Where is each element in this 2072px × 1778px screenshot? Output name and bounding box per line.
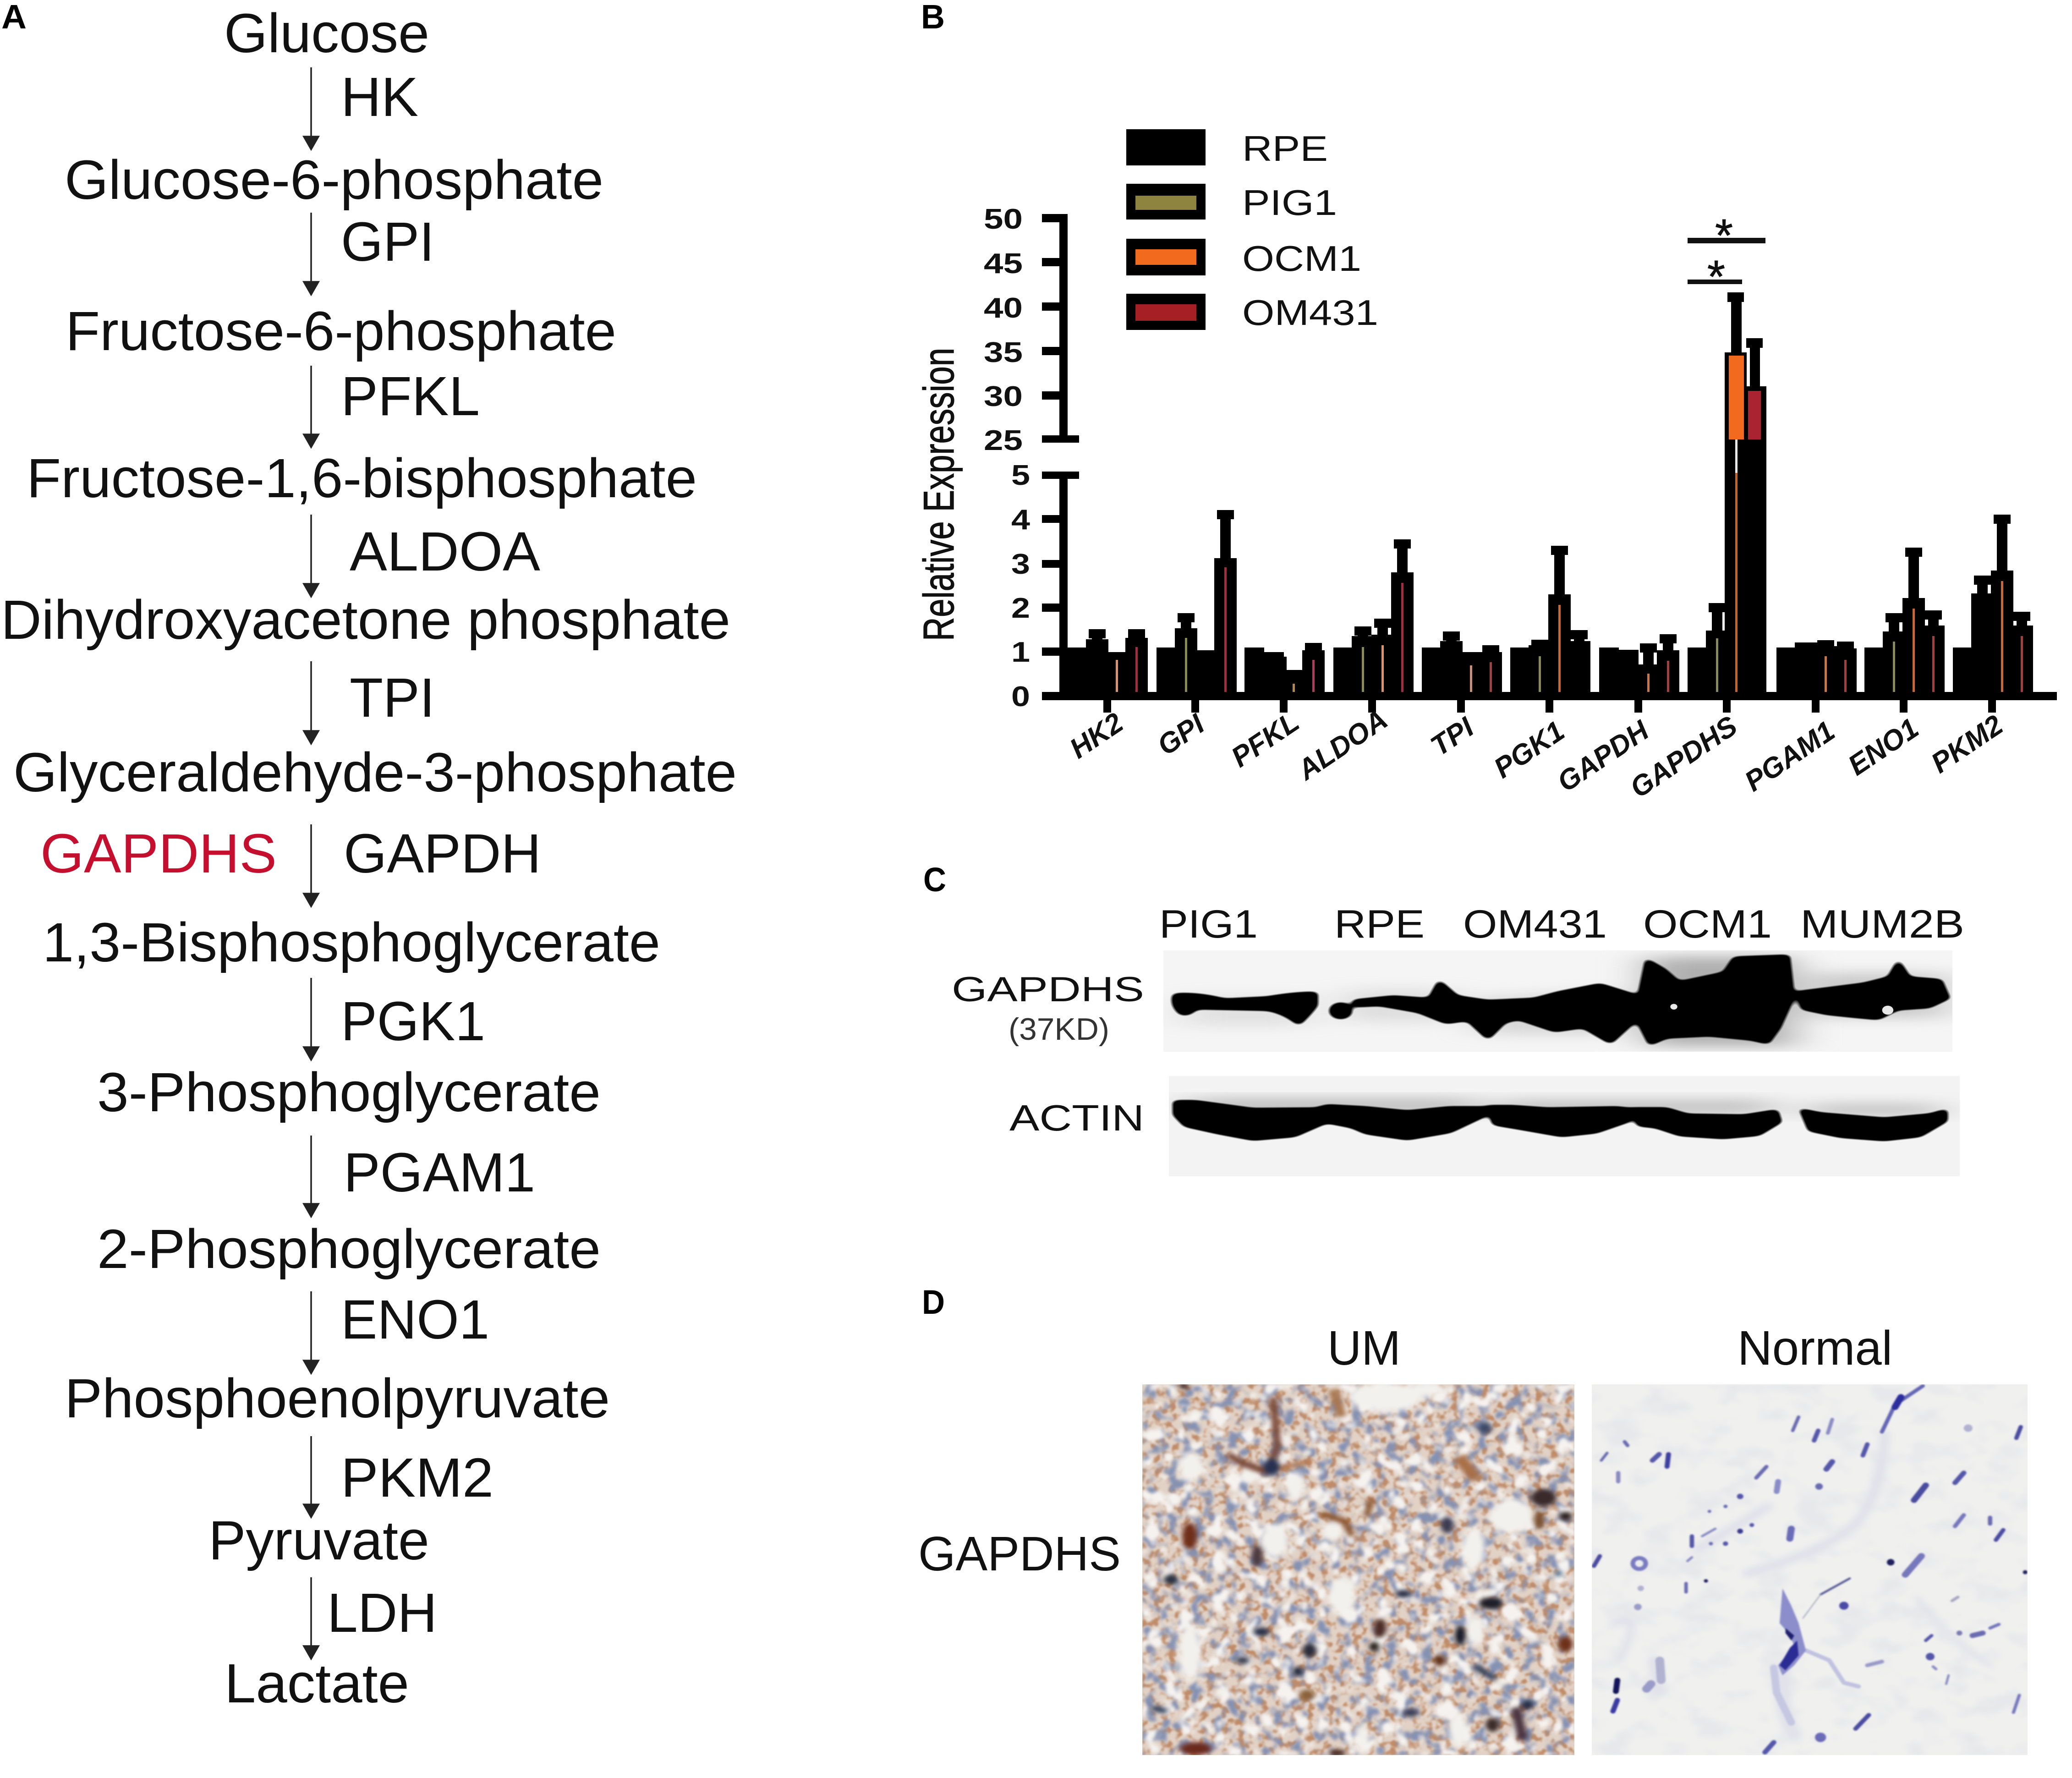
enzyme: PFKL: PFKL <box>341 365 480 427</box>
y axis tick labels: 35 <box>984 337 1023 368</box>
bars: ENO1 <box>1864 548 1945 693</box>
lane labels: RPE <box>1334 902 1425 946</box>
significance bracket: lower: * <box>1707 251 1725 302</box>
x axis gene labels: PFKL <box>1226 706 1305 774</box>
enzyme: ENO1: ENO1 <box>341 1288 489 1350</box>
metabolite: Dihydroxyacetone phosphate: Dihydroxyacetone phosphate <box>1 588 730 651</box>
row label: ACTIN: ACTIN <box>1009 1098 1144 1138</box>
legend label: OM431: OM431 <box>1242 292 1378 333</box>
enzyme: PGAM1: PGAM1 <box>344 1141 535 1203</box>
panel label C: C <box>923 861 946 899</box>
legend swatch: RPE <box>1126 129 1206 165</box>
panel label D: D <box>922 1283 945 1321</box>
bars: HK2 <box>1068 629 1148 693</box>
bars: GPI <box>1157 510 1237 693</box>
y axis tick labels: 0 <box>1011 681 1030 713</box>
x axis gene labels: GAPDH <box>1552 714 1655 798</box>
bars: PGAM1 <box>1776 640 1857 693</box>
enzyme in red: GAPDHS: GAPDHS <box>40 822 277 884</box>
bars: GAPDH <box>1599 634 1679 693</box>
bars: ALDOA <box>1333 539 1414 693</box>
arrow 8 <box>304 1136 318 1217</box>
row label: GAPDHS: GAPDHS <box>952 970 1144 1009</box>
metabolite: Fructose-6-phosphate: Fructose-6-phosphate <box>66 300 616 362</box>
metabolite: Pyruvate: Pyruvate <box>208 1509 429 1571</box>
x axis gene labels: ALDOA <box>1291 703 1393 787</box>
legend swatch: OCM1 <box>1126 239 1206 275</box>
arrow 9 <box>304 1291 318 1373</box>
y axis tick labels: 1 <box>1011 637 1030 668</box>
enzyme: LDH: LDH <box>327 1581 437 1644</box>
metabolite: Glucose-6-phosphate: Glucose-6-phosphate <box>65 148 603 211</box>
significance bracket: upper <box>1688 210 1765 261</box>
arrow 11 <box>304 1577 318 1659</box>
column title: Normal: Normal <box>1738 1321 1892 1375</box>
row label: GAPDHS: GAPDHS <box>918 1527 1121 1581</box>
micrograph: normal tissue with blue nuclei <box>1592 1384 2028 1755</box>
panel C: western blot <box>923 861 1964 1176</box>
legend <box>1126 128 1378 333</box>
legend swatch: PIG1 <box>1126 184 1206 220</box>
metabolite: Fructose-1,6-bisphosphate: Fructose-1,6-bisphosphate <box>27 447 697 509</box>
enzyme: ALDOA: ALDOA <box>350 520 540 582</box>
arrow 1 <box>304 67 318 149</box>
arrow 5 <box>304 661 318 744</box>
legend swatch: OM431 <box>1126 294 1206 330</box>
x axis gene labels: GAPDHS <box>1624 710 1743 804</box>
metabolite: 2-Phosphoglycerate: 2-Phosphoglycerate <box>97 1218 601 1280</box>
lane labels: OM431 <box>1463 902 1607 946</box>
y axis with broken scale <box>1042 214 1079 693</box>
legend label: RPE: RPE <box>1242 128 1328 169</box>
lane labels: OCM1 <box>1643 902 1772 946</box>
y axis tick labels: 40 <box>984 292 1023 324</box>
metabolite: Glucose: Glucose <box>224 2 429 64</box>
enzyme: PGK1: PGK1 <box>341 990 485 1052</box>
x axis gene labels: PGAM1 <box>1739 715 1841 798</box>
arrow 7 <box>304 978 318 1060</box>
metabolite: Phosphoenolpyruvate: Phosphoenolpyruvate <box>65 1367 610 1429</box>
arrow 3 <box>304 366 318 447</box>
metabolite: Lactate: Lactate <box>225 1652 409 1714</box>
column title: UM: UM <box>1327 1321 1401 1375</box>
y axis tick labels: 30 <box>984 381 1023 412</box>
enzyme: TPI: TPI <box>350 666 435 729</box>
x axis gene labels: ENO1 <box>1842 712 1924 782</box>
legend label: OCM1: OCM1 <box>1242 238 1361 279</box>
y axis tick labels: 45 <box>984 248 1023 280</box>
x axis gene labels: PKM2 <box>1925 709 2009 779</box>
x axis gene labels: PGK1 <box>1488 715 1570 785</box>
significance bracket: upper: * <box>1715 210 1733 261</box>
y axis tick labels: 2 <box>1011 593 1030 624</box>
panel A: glycolysis pathway <box>1 0 737 1714</box>
metabolite: 3-Phosphoglycerate: 3-Phosphoglycerate <box>97 1061 601 1123</box>
y axis tick labels <box>984 203 1031 713</box>
arrow 2 <box>304 213 318 295</box>
x axis gene labels <box>1064 703 2009 804</box>
bars: PKM2 <box>1953 515 2033 693</box>
lane labels <box>1159 902 1964 946</box>
panel B: bar chart of relative expression <box>915 0 2057 804</box>
x axis gene labels: GPI <box>1152 708 1211 762</box>
y axis tick labels: 4 <box>1011 504 1031 536</box>
micrograph: UM tissue with brown staining <box>1142 1382 1574 1756</box>
enzyme: HK: HK <box>341 66 418 128</box>
panel D: immunohistochemistry <box>918 1283 2028 1756</box>
x axis baseline and ticks <box>1042 692 2057 713</box>
bars: TPI <box>1422 631 1502 693</box>
metabolite: 1,3-Bisphosphoglycerate: 1,3-Bisphosphoglycerate <box>43 911 660 973</box>
x axis gene labels: TPI <box>1425 711 1480 763</box>
bars: GAPDHS with orange and red segments above the axis break <box>1688 292 1766 693</box>
bars: PFKL <box>1244 643 1325 693</box>
blot: GAPDHS bands <box>1163 950 1952 1052</box>
y axis tick labels: 5 <box>1011 460 1030 491</box>
arrow 6 <box>304 824 318 906</box>
y axis title: Relative Expression <box>915 348 963 641</box>
legend label: PIG1: PIG1 <box>1242 182 1337 223</box>
bars: PGK1 <box>1510 546 1590 693</box>
metabolite: Glyceraldehyde-3-phosphate: Glyceraldehyde-3-phosphate <box>13 741 737 803</box>
enzyme: GPI: GPI <box>341 210 434 273</box>
lane labels: PIG1 <box>1159 902 1258 946</box>
arrow 4 <box>304 515 318 597</box>
enzyme: GAPDH: GAPDH <box>344 822 541 884</box>
blot: ACTIN bands <box>1169 1076 1960 1176</box>
significance bracket: lower <box>1688 251 1742 302</box>
x axis gene labels: HK2 <box>1064 707 1129 765</box>
y axis tick labels: 3 <box>1011 549 1030 580</box>
y axis tick labels: 25 <box>984 425 1023 456</box>
enzyme: PKM2: PKM2 <box>341 1446 493 1509</box>
y axis tick labels: 50 <box>984 203 1023 235</box>
lane labels: MUM2B <box>1800 902 1964 946</box>
arrow 10 <box>304 1436 318 1517</box>
row label: 37KD: (37KD) <box>1009 1012 1109 1047</box>
